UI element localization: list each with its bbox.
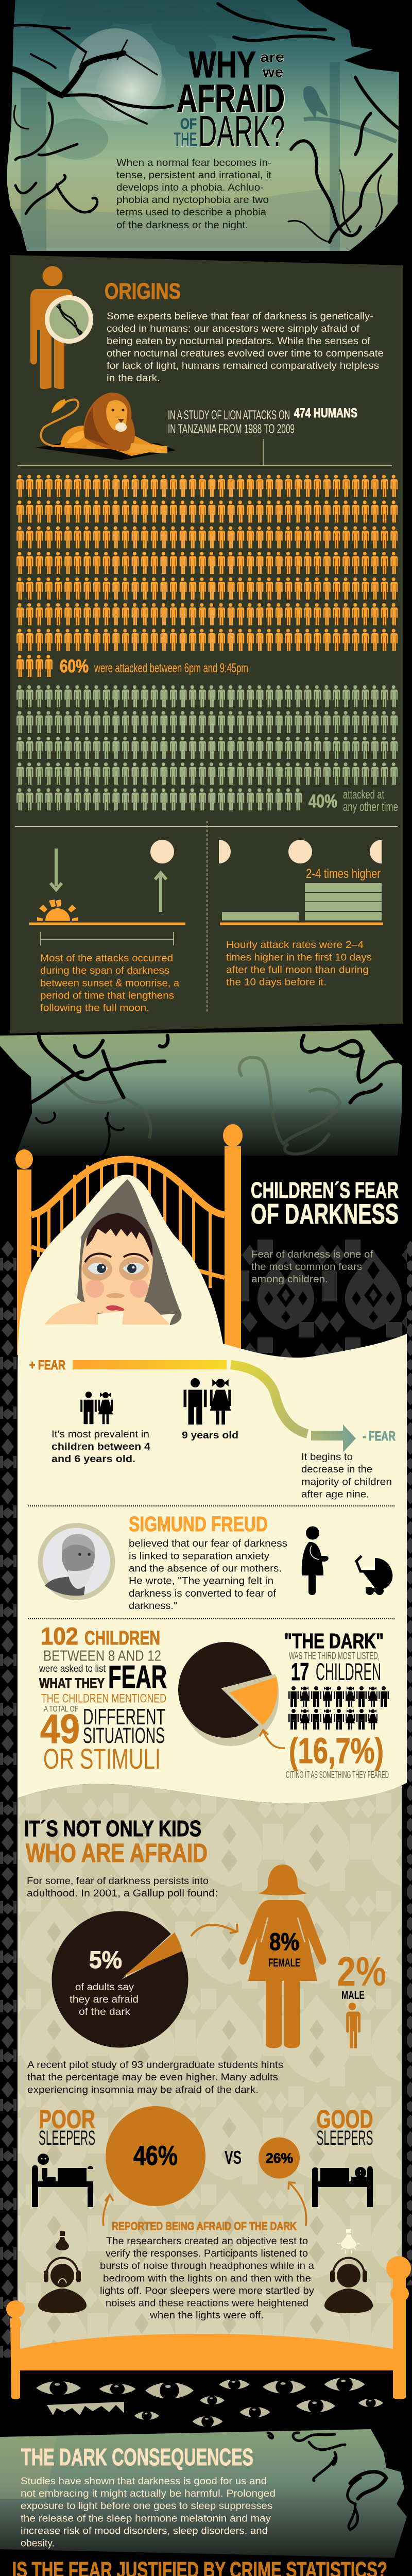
damask wallpaper	[241, 1240, 407, 1358]
pie chart: the dark	[178, 1642, 285, 1748]
pie chart: 5 percent: of adults say	[75, 1982, 134, 1993]
panel: hero forest scene	[0, 0, 412, 251]
researchers text: lights off. Poor sleepers were more startled by	[100, 2286, 315, 2297]
researchers text: when the lights were off.	[149, 2310, 264, 2321]
origins text	[107, 311, 384, 384]
fear scale: + FEAR	[29, 1358, 65, 1372]
consequences text: exposure to light before one goes to sleep suppresses	[21, 2501, 272, 2512]
intro text block: When a normal fear becomes in-	[116, 158, 271, 168]
hero frame silhouette	[0, 0, 412, 251]
label: 40 percent: 40%	[308, 791, 337, 811]
origins text: coded in humans: our ancestors were simply afraid of	[107, 324, 360, 334]
icon: listener sad	[38, 2258, 87, 2313]
moon text	[226, 940, 372, 988]
pilot study text	[27, 2060, 283, 2095]
comparison: poor vs good sleepers: GOOD	[316, 2105, 373, 2134]
origins text: Some experts believe that fear of darkness is genetically-	[107, 311, 373, 322]
heading: children's fear	[251, 1178, 399, 1230]
icon: lion	[36, 393, 176, 460]
stat: 16.7 percent	[286, 1731, 389, 1780]
fear scale	[29, 1358, 396, 1452]
lion study statement: IN A STUDY OF LION ATTACKS ON	[168, 408, 290, 422]
icon: children 4 to 6	[80, 1392, 113, 1424]
intro text block: tense, persistent and irrational, it	[116, 170, 272, 181]
children's fear text: among children.	[251, 1274, 328, 1285]
icon: monster eyes under bed	[36, 2377, 383, 2428]
decrease text	[301, 1452, 392, 1500]
label: 60 percent: 60%	[60, 656, 89, 676]
consequences text: not embracing it might actually be harmful. Prolonged	[21, 2488, 276, 2499]
children's fear text: the most common fears	[251, 1262, 362, 1273]
title: AFRAID	[177, 77, 285, 121]
consequences text: increase risk of mood disorders, sleep disorders, and	[21, 2526, 268, 2537]
children's fear text	[251, 1249, 373, 1285]
Freud text: and the absence of our mothers.	[129, 1564, 282, 1574]
title: OF	[180, 116, 197, 132]
moon text: after the full moon than during	[226, 965, 369, 976]
label: 60 percent: were attacked between 6pm and 9:45pm	[94, 661, 248, 675]
stat: 102 children: SITUATIONS	[83, 1723, 165, 1748]
arrow: to 26 percent	[288, 2182, 306, 2226]
title: DARK?	[199, 108, 285, 157]
icon: bed headboard	[15, 1124, 243, 1355]
cream blanket shape	[18, 1175, 407, 1803]
arrow: to 46 percent	[103, 2195, 113, 2226]
intro text block: phobia and nyctophobia are two	[116, 195, 269, 206]
Gallup intro text: For some, fear of darkness persists into	[27, 1876, 209, 1887]
title: are	[260, 49, 284, 65]
intro text block	[116, 158, 272, 231]
sunset text: period of time that lengthens	[40, 991, 174, 1002]
intro text block: terms used to describe a phobia	[116, 207, 266, 218]
diagram: moon phases bars	[219, 840, 383, 925]
origins text: in the dark.	[107, 373, 160, 384]
Freud text: believed that our fear of darkness	[129, 1538, 287, 1549]
title: we	[262, 64, 283, 80]
prevalence text: children between 4	[52, 1442, 150, 1452]
consequences text: the release of the sleep hormone melatonin and may	[21, 2513, 271, 2524]
stat: 102 children: DIFFERENT	[83, 1704, 165, 1730]
heading: not only kids: WHO ARE AFRAID	[26, 1838, 208, 1868]
researchers text: bursts of noise through headphones while in a	[100, 2261, 314, 2272]
icon: sleeping in bed	[312, 2166, 373, 2207]
panel: cream blanket	[15, 1124, 407, 1803]
researchers text: verify the responses. Participants listened to	[106, 2248, 308, 2259]
researchers text: noises and these reactions were heightened	[106, 2298, 308, 2309]
heading: dark consequences: THE DARK CONSEQUENCES	[21, 2444, 253, 2470]
comparison: poor vs good sleepers: 46%	[133, 2141, 178, 2171]
pie chart: 5 percent: 5%	[89, 1946, 122, 1973]
sunset text: following the full moon.	[40, 1003, 149, 1014]
icon: woman 8 percent	[239, 1865, 326, 2048]
chart: 17 children icons	[288, 1686, 389, 1730]
stat: 102 children	[39, 1622, 167, 1775]
panel: forest interlude	[0, 1030, 412, 1156]
consequences text: obesity.	[21, 2538, 55, 2549]
heading: origins: ORIGINS	[105, 279, 181, 304]
icon: stroller	[355, 1556, 392, 1595]
stat: 102 children: BETWEEN 8 AND 12	[43, 1648, 161, 1664]
icon: person with DNA	[30, 266, 93, 389]
stat: 102 children: A TOTAL OF	[44, 1705, 78, 1714]
icon: awake in bed	[32, 2154, 93, 2207]
icon: children 9	[183, 1378, 231, 1425]
decrease text: It begins to	[301, 1452, 353, 1463]
prevalence text	[52, 1429, 238, 1465]
lion study statement: 474 HUMANS	[294, 406, 357, 420]
stat: 16.7 percent: (16,7%)	[289, 1731, 384, 1771]
prevalence text: and 6 years old.	[52, 1454, 135, 1465]
icon: pregnant mother	[302, 1526, 329, 1595]
Freud text: darkness."	[129, 1601, 177, 1612]
title: THE	[174, 129, 197, 151]
icon: scared child	[45, 1179, 182, 1329]
Freud text: He wrote, "The yearning felt in	[129, 1576, 273, 1587]
icon: listener neutral	[324, 2258, 373, 2313]
comparison: poor vs good sleepers: 26%	[266, 2150, 293, 2166]
lion study statement	[168, 406, 357, 436]
icon: man 2 percent: 2%	[337, 1948, 386, 1994]
origins text: for lack of light, humans remained comparatively helpless	[107, 361, 379, 371]
fear scale: - FEAR	[363, 1429, 396, 1444]
moon text: Hourly attack rates were 2–4	[226, 940, 364, 951]
intro text block: of the darkness or the night.	[116, 220, 248, 231]
stat: 102 children: FEAR	[108, 1659, 167, 1695]
title: WHY	[189, 44, 256, 86]
pie chart: 5 percent: of the dark	[79, 2007, 131, 2018]
decrease text: after age nine.	[301, 1489, 369, 1500]
researchers text: bedroom with the lights on and then with the	[103, 2273, 311, 2284]
stat: 102 children: CHILDREN	[84, 1628, 160, 1649]
moon text: the 10 days before it.	[226, 977, 327, 988]
chart: 40 percent green people	[16, 685, 398, 810]
decrease text: majority of children	[301, 1477, 392, 1488]
chart: 60 percent orange people	[16, 475, 398, 677]
diagram: moon phases bars: 2-4 times higher	[306, 867, 381, 881]
Freud heading: SIGMUND FREUD	[129, 1512, 268, 1536]
title: AFRAID	[178, 77, 286, 121]
Gallup intro text: adulthood. In 2001, a Gallup poll found:	[27, 1888, 218, 1899]
comparison: poor vs good sleepers: POOR	[39, 2105, 95, 2134]
comparison: poor vs good sleepers	[32, 2105, 373, 2321]
decrease text: decrease in the	[301, 1464, 372, 1475]
children's fear text: Fear of darkness is one of	[251, 1249, 373, 1260]
researchers text	[100, 2236, 315, 2321]
icon: bulb on	[337, 2229, 360, 2253]
comparison: poor vs good sleepers: VS	[225, 2147, 242, 2168]
sunset text: between sunset & moonrise, a	[40, 978, 179, 989]
panel: adults	[0, 1784, 412, 2576]
pilot study text: experiencing insomnia may be afraid of the dark.	[27, 2084, 259, 2095]
stat: 102 children: were asked to list	[39, 1664, 106, 1674]
stat: 102 children: OR STIMULI	[43, 1742, 161, 1775]
title	[174, 44, 286, 157]
stat: 102 children: 49	[40, 1706, 80, 1752]
label: 40 percent: attacked at	[343, 788, 384, 802]
heading: not only kids	[24, 1816, 208, 1868]
pie chart: 5 percent: they are afraid	[70, 1994, 139, 2005]
icon: Freud portrait	[38, 1523, 115, 1600]
Gallup intro text	[27, 1876, 218, 1899]
lion study statement: IN TANZANIA FROM 1988 TO 2009	[168, 422, 295, 436]
Freud text: darkness is converted to fear of	[129, 1588, 277, 1599]
pie chart: 5 percent	[52, 1911, 237, 2047]
label: 60 percent	[60, 656, 248, 676]
stat: the dark: "THE DARK"	[284, 1629, 384, 1653]
sunset text: during the span of darkness	[40, 965, 169, 976]
origins text: other nocturnal creatures evolved over time to compensate	[107, 348, 384, 359]
panel: the dark consequences	[0, 2429, 412, 2558]
stat: 102 children: 102	[41, 1622, 78, 1650]
prevalence text: It's most prevalent in	[52, 1429, 149, 1440]
panel: origins	[10, 255, 403, 1033]
icon: bulb off	[56, 2231, 69, 2250]
icon: woman 8 percent: FEMALE	[268, 1956, 300, 1969]
sunset text	[40, 953, 179, 1014]
sunset text: Most of the attacks occurred	[40, 953, 173, 964]
researchers text: The researchers created an objective test to	[106, 2236, 308, 2247]
consequences text: Studies have shown that darkness is good for us and	[21, 2476, 267, 2487]
icon: woman 8 percent: 8%	[269, 1928, 299, 1955]
reported label: REPORTED BEING AFRAID OF THE DARK	[112, 2220, 297, 2233]
origins text: being eaten by nocturnal predators. While the senses of	[107, 336, 371, 347]
Freud text	[129, 1538, 287, 1612]
pilot study text: A recent pilot study of 93 undergraduate students hints	[27, 2060, 283, 2071]
stat: 102 children: THE CHILDREN MENTIONED	[41, 1691, 166, 1705]
consequences text	[21, 2476, 276, 2549]
icon: bed footboard	[6, 2256, 411, 2399]
icon: man 2 percent: MALE	[341, 1989, 365, 2002]
heading: not only kids: IT´S NOT ONLY KIDS	[24, 1816, 201, 1841]
Freud text: is linked to separation anxiety	[129, 1551, 270, 1562]
pilot study text: that the percentage may be even higher. Many adults	[27, 2072, 278, 2083]
title: DARK?	[198, 107, 285, 156]
diagram: sunset to moonrise	[29, 840, 185, 945]
intro text block: develops into a phobia. Achluo-	[116, 182, 264, 193]
icon: monster teeth	[47, 2402, 124, 2415]
icon: man 2 percent	[337, 1948, 386, 2048]
moon text: times higher in the first 10 days	[226, 952, 372, 963]
comparison: poor vs good sleepers: SLEEPERS	[39, 2127, 95, 2149]
stat: 102 children: WHAT THEY	[39, 1675, 105, 1691]
stat: the dark: 17	[291, 1658, 309, 1685]
stat: the dark	[284, 1629, 384, 1685]
label: 40 percent	[308, 788, 398, 814]
prevalence text: 9 years old	[182, 1430, 238, 1441]
